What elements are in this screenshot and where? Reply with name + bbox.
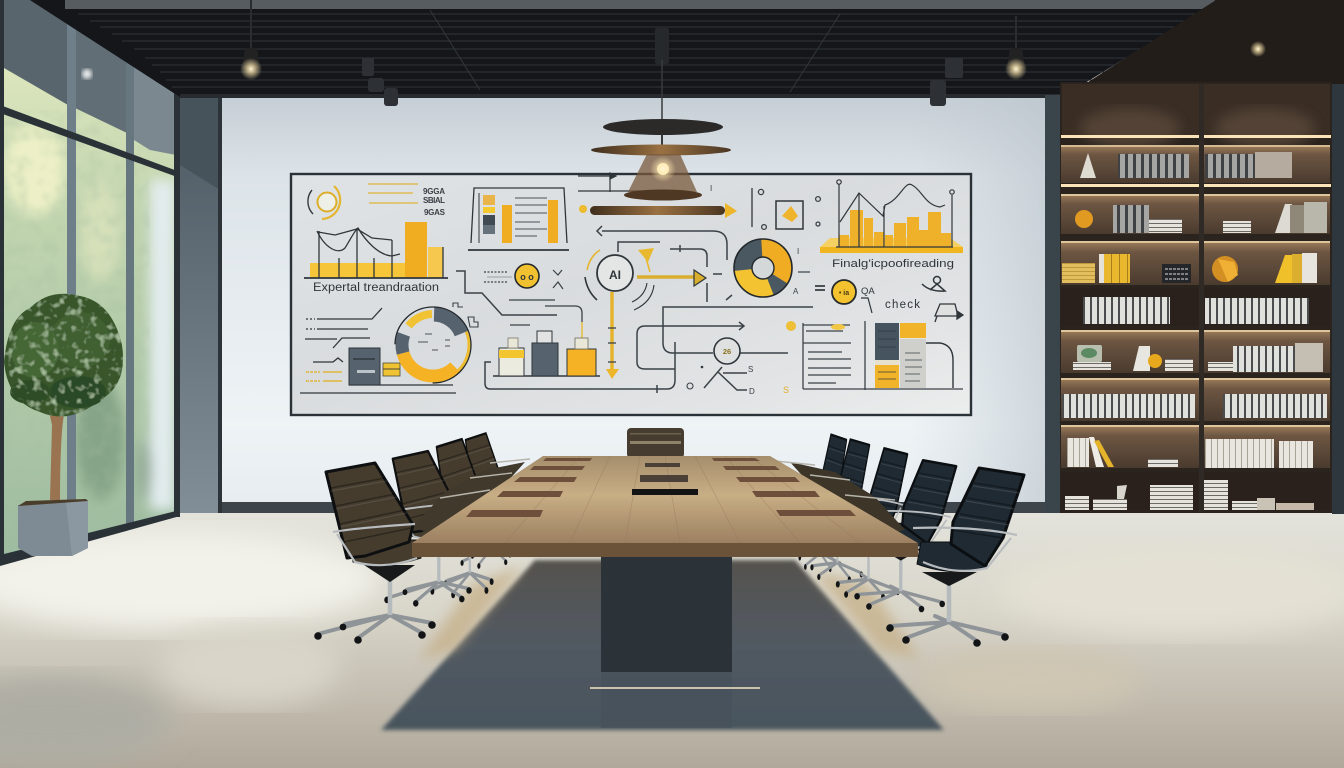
side panels xyxy=(1045,95,1061,513)
chair: left 1 xyxy=(314,463,436,644)
centre divider xyxy=(1199,84,1204,512)
panel frame xyxy=(291,174,971,415)
chair: right 5 xyxy=(798,434,847,572)
window frames xyxy=(0,0,180,566)
books row 6 xyxy=(1062,394,1327,418)
window wall xyxy=(0,0,180,566)
AI circle with arrows xyxy=(585,248,706,379)
books row 8 xyxy=(1065,480,1314,510)
lists lower left xyxy=(300,308,456,393)
dark compartments xyxy=(1061,288,1330,510)
wall infographic panel xyxy=(291,173,971,415)
QA check badge: check xyxy=(885,299,920,311)
books row 5 xyxy=(1073,343,1323,372)
top arrow xyxy=(578,173,640,192)
left seats and armrests mass xyxy=(412,459,530,535)
bookcase xyxy=(1045,82,1344,514)
ring icon with goals xyxy=(308,184,446,219)
AI circle with arrows: AI xyxy=(609,268,621,282)
chair: right 3 xyxy=(836,448,907,600)
chair: far end xyxy=(627,428,684,458)
pillar xyxy=(180,90,222,513)
books row 4 xyxy=(1083,297,1309,324)
ceiling slats xyxy=(78,10,1200,92)
warm floor glints beside carpet xyxy=(420,565,920,660)
floor light reflections xyxy=(0,530,1344,765)
spot left xyxy=(240,0,262,80)
chart: final proofreading xyxy=(820,180,963,270)
arrow left routing xyxy=(597,226,732,302)
document with stacked columns xyxy=(803,321,963,390)
smiley badge and connector: o o xyxy=(520,272,534,282)
conference table xyxy=(412,456,918,672)
donut chart xyxy=(734,239,792,297)
ring icon with goals: 9GAS xyxy=(424,208,446,217)
QA check badge xyxy=(815,280,920,313)
icon: person xyxy=(922,276,945,291)
ceiling xyxy=(30,0,1344,98)
node circle: S xyxy=(748,365,753,374)
foliage xyxy=(4,294,123,416)
track spots left xyxy=(362,58,398,106)
notepads right xyxy=(712,458,856,516)
chart: expertal transformation xyxy=(304,222,448,294)
back wall xyxy=(220,95,1050,507)
table base xyxy=(601,557,732,672)
ceiling lights xyxy=(240,0,1266,106)
foliage texture xyxy=(10,111,150,420)
node circle xyxy=(687,321,796,396)
centre devices xyxy=(632,463,698,495)
books row 7 xyxy=(1067,437,1313,468)
chart: final proofreading: Finalg'icpoofireading xyxy=(832,258,954,270)
pendant lamp xyxy=(590,60,731,215)
carpet reflection xyxy=(590,672,760,728)
ring chart left xyxy=(386,298,480,392)
trunk xyxy=(42,385,70,500)
icon: square with yellow blob: I xyxy=(710,184,712,193)
floor xyxy=(0,505,1344,768)
track spots right xyxy=(930,58,963,106)
wood grain xyxy=(505,456,860,543)
wall right shading xyxy=(700,95,1050,505)
pendant mount xyxy=(655,28,669,64)
QA check badge: • ia xyxy=(839,290,849,297)
flow lines bottom centre xyxy=(485,307,813,393)
chair: right 2 xyxy=(854,460,956,612)
pot xyxy=(18,500,88,556)
icon: square with yellow blob xyxy=(710,184,820,296)
chair: left 4 xyxy=(460,433,512,569)
right seats and armrests mass xyxy=(775,461,905,535)
table top xyxy=(412,456,918,543)
window pane reflection xyxy=(82,69,92,79)
three bar boxes xyxy=(493,331,600,376)
downlight xyxy=(1250,41,1266,57)
books row 2 xyxy=(1075,202,1327,233)
books row 1 xyxy=(1080,152,1292,178)
led strips xyxy=(1061,135,1331,427)
smiley badge and connector xyxy=(456,264,582,338)
icon: square with yellow blob: I xyxy=(797,247,799,256)
upper slatted blinds xyxy=(4,0,68,105)
ceiling wood section xyxy=(1085,0,1344,84)
icon: square with yellow blob: A xyxy=(793,287,799,296)
books row 3 xyxy=(1062,253,1317,283)
report window icon xyxy=(468,188,569,250)
compartments xyxy=(1061,145,1330,468)
file cabinet icon xyxy=(349,348,400,385)
node circle: D xyxy=(749,387,755,396)
foliage outside xyxy=(5,125,175,510)
chair: right 4 xyxy=(810,439,870,582)
node circle: 26 xyxy=(723,347,731,356)
chair: left 2 xyxy=(384,451,472,607)
pendant arrow across panel xyxy=(579,203,737,218)
chair: right 1 xyxy=(886,468,1024,647)
QA check badge: QA xyxy=(861,286,875,297)
table edge xyxy=(412,543,918,557)
carpet under table xyxy=(381,560,944,730)
icon: board arrow xyxy=(935,304,963,322)
ring icon with goals: 9GGA xyxy=(423,187,445,196)
ring icon with goals: SBIAL xyxy=(423,196,445,205)
plant xyxy=(4,294,123,556)
baseboard xyxy=(220,502,1050,513)
node circle: S xyxy=(783,385,789,395)
chair: left 3 xyxy=(430,439,494,598)
chart: expertal transformation: Expertal treandraation xyxy=(313,282,439,294)
window glass xyxy=(0,0,180,562)
spot right xyxy=(1005,16,1027,80)
notepads left xyxy=(466,458,592,517)
